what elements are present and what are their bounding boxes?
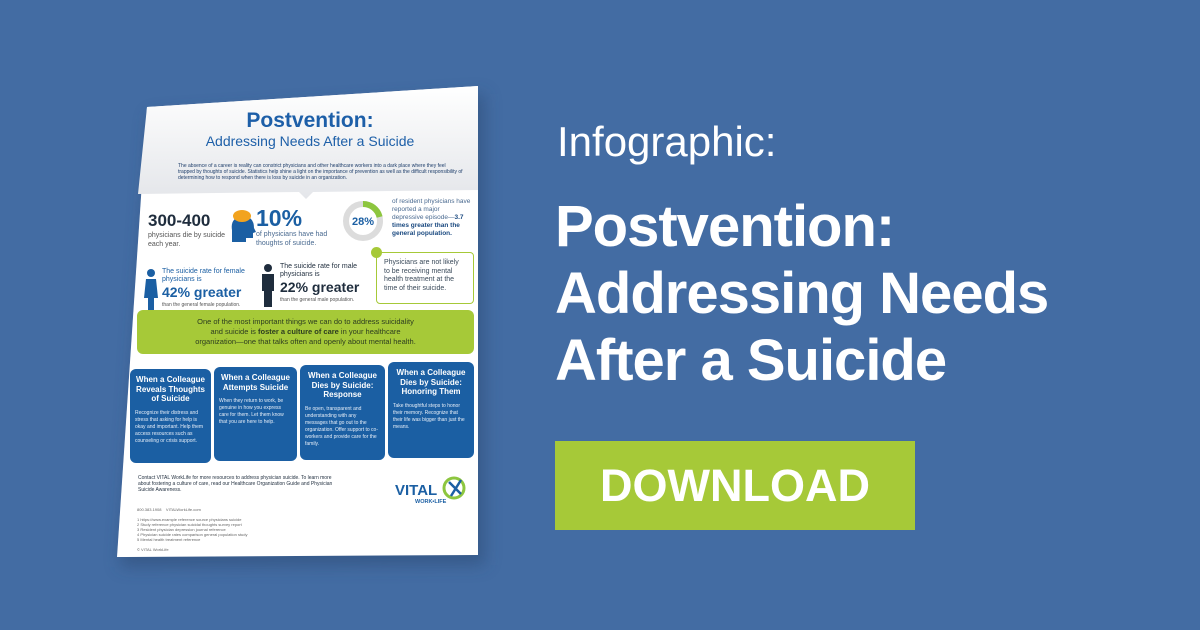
- female stat: 42% greater: [162, 284, 241, 300]
- doc intro text: The absence of a career is reality can constrict physicians and other healthcare workers into a dark place where they feel trapped by thoughts of suicide. Statistics help shine a light on the importance of prevention as well as the difficult responsibility of determining how to respond when there is loss by suicide in an organization.: [178, 163, 463, 181]
- download button: [555, 441, 915, 530]
- icon: head with cloud: [232, 210, 256, 242]
- stat 10%: [256, 205, 327, 247]
- male stat: 22% greater: [280, 279, 359, 295]
- main title: [555, 194, 1048, 393]
- card: reveals thoughts: When a Colleague Reveals Thoughts of Suicide: [136, 375, 205, 403]
- card: honoring: Take thoughtful steps to honor their memory. Recognize that their life was bigger than just the means.: [393, 402, 465, 430]
- card: attempts: When they return to work, be genuine in how you express care for them. Let them know that you are here to help.: [219, 398, 284, 425]
- stat 300-400: [148, 211, 225, 248]
- label: infographic: Infographic:: [557, 118, 776, 165]
- card: attempts: [214, 367, 297, 461]
- card: response: Be open, transparent and understanding with any messages that go out to the organization. Offer support to co-workers and provide care for the family.: [305, 406, 378, 446]
- card: response: [300, 365, 385, 460]
- stat 300-400: 300-400: [148, 211, 210, 230]
- references: 4 Physician suicide rates comparison general population study: [137, 532, 248, 537]
- main title: Postvention:: [555, 194, 894, 259]
- green banner: organization—one that talks often and openly about mental health.: [195, 337, 416, 346]
- stat 10%: 10%: [256, 205, 302, 231]
- stat 28% text: of resident physicians have reported a major depressive episode—3.7 times greater than the general population.: [392, 198, 470, 237]
- references: 5 Mental health treatment reference: [137, 537, 200, 542]
- callout box: Physicians are not likely to be receiving mental health treatment at the time of their suicide.: [384, 259, 459, 292]
- references: [137, 507, 248, 552]
- references: 3 Resident physician depression journal reference: [137, 527, 226, 532]
- doc title: Addressing Needs After a Suicide: [206, 133, 414, 149]
- download button: DOWNLOAD: [600, 460, 870, 511]
- donut chart 28%: 28%: [352, 216, 374, 228]
- stat 10%: of physicians have had thoughts of suicide.: [256, 231, 327, 247]
- stat 300-400: physicians die by suicide each year.: [148, 232, 225, 248]
- card: honoring: When a Colleague Dies by Suicide: Honoring Them: [397, 368, 465, 396]
- references: 800.383.1908 VITALWorkLife.com: [137, 507, 201, 512]
- references: © VITAL WorkLife: [137, 547, 169, 552]
- card: reveals thoughts: [130, 369, 211, 463]
- references: 1 https://www.example reference source physicians suicide: [137, 517, 242, 522]
- card: reveals thoughts: Recognize their distress and stress that asking for help is okay and important. Help them access resources such as counseling or crisis support.: [135, 410, 203, 444]
- main title: Addressing Needs: [555, 261, 1048, 326]
- female stat: The suicide rate for female physicians is than the general female population.: [162, 268, 245, 308]
- logo: vital worklife: [395, 476, 466, 505]
- green banner: and suicide is foster a culture of care in your healthcare: [210, 327, 401, 336]
- main title: After a Suicide: [555, 328, 946, 393]
- references: 2 Study reference physician suicidal thoughts survey report: [137, 522, 242, 527]
- male stat: The suicide rate for male physicians is than the general male population.: [280, 263, 357, 303]
- green banner: One of the most important things we can do to address suicidality: [197, 317, 414, 326]
- logo: vital worklife: VITAL: [395, 482, 437, 499]
- card: honoring: [388, 362, 474, 458]
- callout box: [376, 252, 474, 304]
- logo: vital worklife: WORK•LIFE: [415, 499, 446, 505]
- doc title: [206, 109, 414, 149]
- green banner: [137, 310, 474, 354]
- card: attempts: When a Colleague Attempts Suicide: [221, 373, 290, 392]
- document preview: [117, 86, 489, 571]
- donut chart 28%: [343, 201, 383, 241]
- footer text: Contact VITAL WorkLife for more resources to address physician suicide. To learn more about fostering a culture of care, read our Healthcare Organization Guide and Physician Suicide Awareness.: [138, 475, 332, 493]
- doc title: Postvention:: [246, 109, 374, 132]
- card: response: When a Colleague Dies by Suicide: Response: [308, 371, 377, 399]
